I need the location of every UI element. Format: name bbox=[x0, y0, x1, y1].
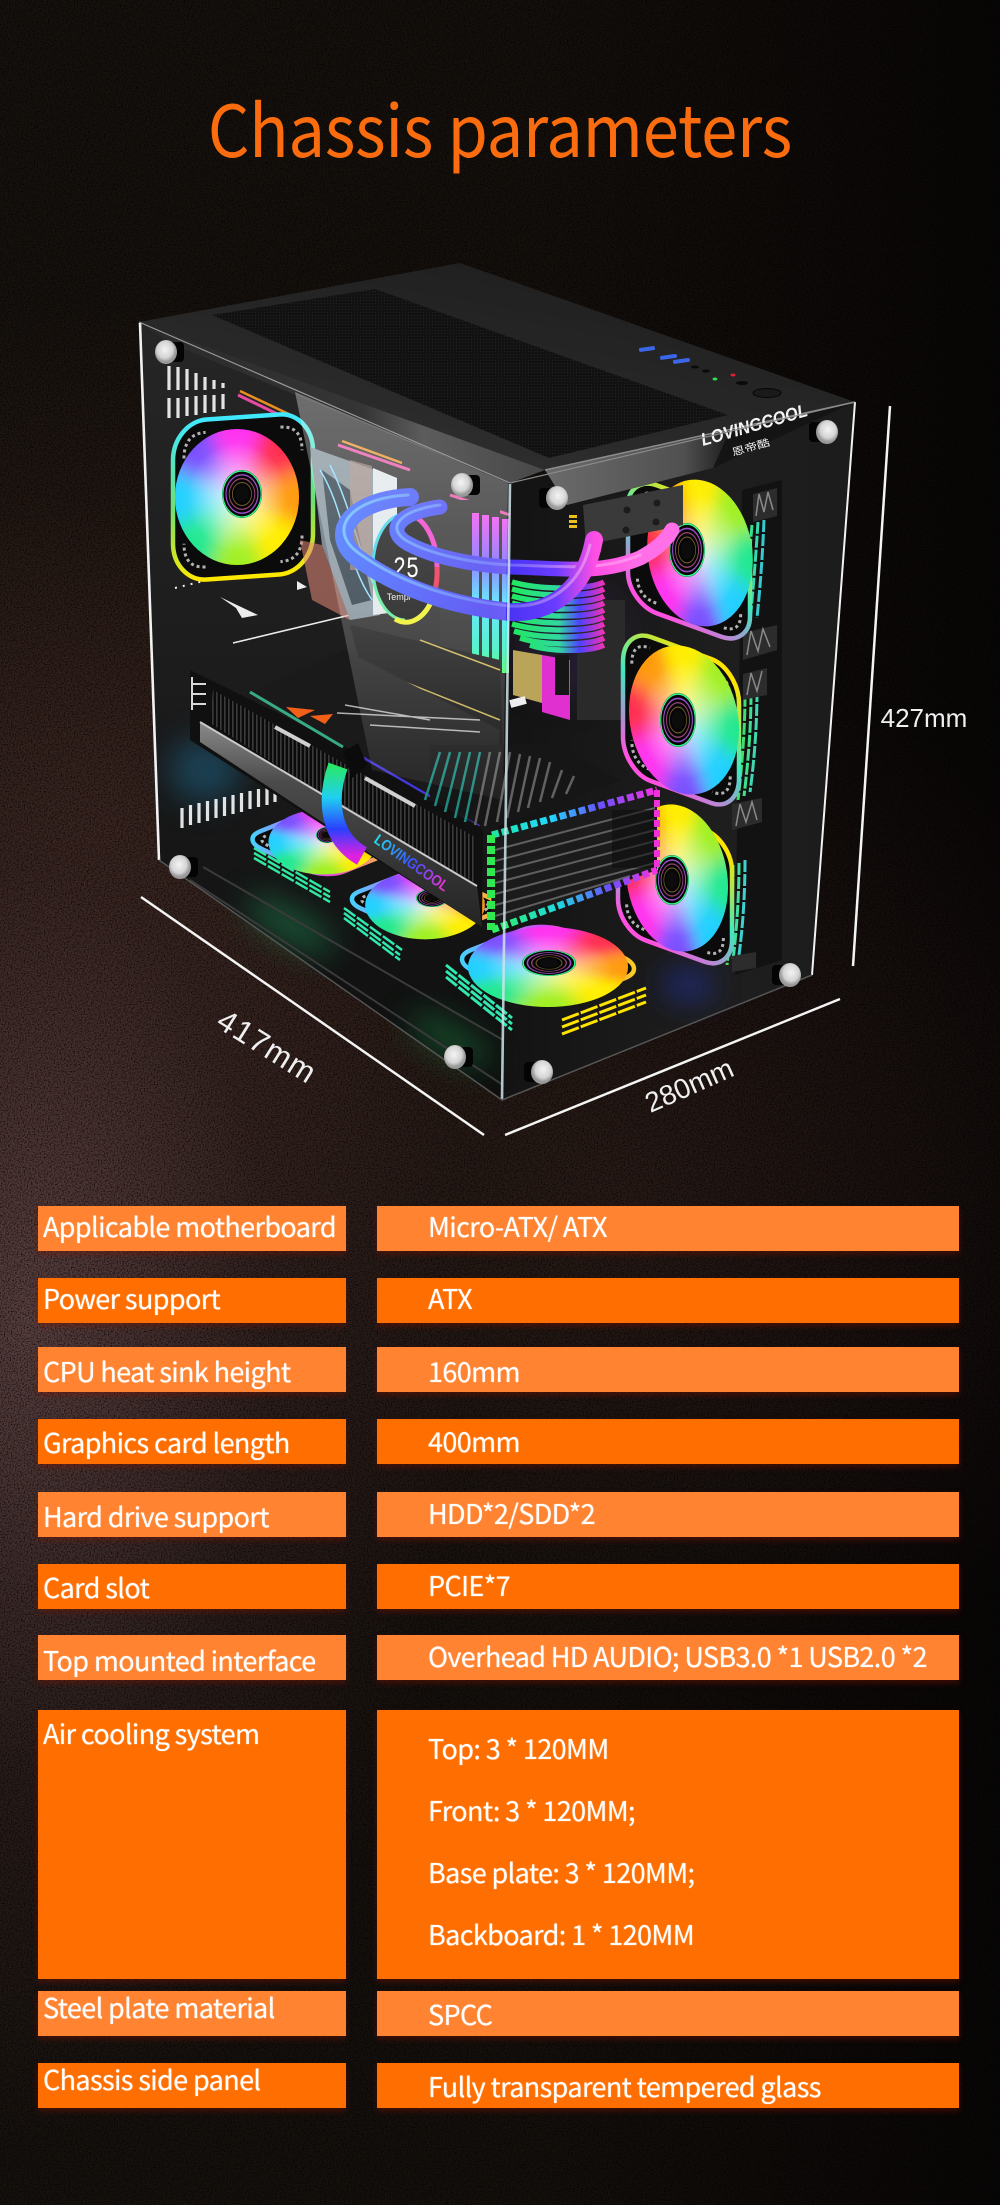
spec row: Graphics card length bbox=[36, 1419, 962, 1470]
value cell: PCIE*7 bbox=[428, 1565, 510, 1604]
label cell bbox=[38, 1492, 346, 1537]
card body bbox=[190, 670, 483, 927]
fan: bottom front bbox=[439, 912, 657, 1034]
spec row: Air cooling system bbox=[35, 1710, 962, 1985]
RGB cable bundle bbox=[512, 582, 604, 650]
fan: rear bbox=[152, 404, 322, 590]
dimension: width 280mm: 280mm bbox=[640, 1052, 738, 1119]
value cell: Overhead HD AUDIO; USB3.0 *1 USB2.0 *2 bbox=[428, 1636, 927, 1675]
value cell: Front: 3 * 120MM; bbox=[428, 1790, 635, 1829]
rear RGB strip bbox=[238, 395, 510, 515]
spec row: CPU heat sink height bbox=[36, 1347, 962, 1398]
side fans backing with LEDs bbox=[727, 480, 782, 975]
dimension: depth 417mm: 417mm bbox=[211, 1002, 324, 1091]
label cell bbox=[38, 1710, 346, 1979]
value cell bbox=[377, 1419, 959, 1464]
fan: bottom middle bbox=[340, 858, 510, 960]
top control panel bbox=[639, 346, 781, 398]
card logo: LOVINGCOOL bbox=[371, 831, 452, 895]
value cell bbox=[377, 1991, 959, 2036]
spec row: Card slot bbox=[35, 1564, 962, 1615]
spec row: Hard drive support bbox=[36, 1492, 962, 1543]
value cell: HDD*2/SDD*2 bbox=[428, 1493, 595, 1532]
label cell bbox=[38, 1419, 346, 1464]
value cell: ATX bbox=[428, 1278, 472, 1317]
label cell bbox=[38, 2063, 346, 2108]
spec row: Chassis side panel bbox=[35, 2059, 962, 2114]
spec row: Steel plate material bbox=[35, 1987, 962, 2042]
value cell: Micro-ATX/ ATX bbox=[428, 1206, 607, 1245]
label cell: Chassis side panel bbox=[43, 2059, 260, 2098]
value cell bbox=[377, 1710, 959, 1979]
label cell: Card slot bbox=[43, 1567, 149, 1606]
left top edge band bbox=[139, 322, 545, 483]
fan: bottom rear bbox=[241, 798, 405, 902]
label cell bbox=[38, 1347, 346, 1392]
value cell: Fully transparent tempered glass bbox=[428, 2066, 821, 2105]
label cell: Hard drive support bbox=[43, 1496, 269, 1535]
RAM modules bbox=[472, 513, 509, 673]
value cell bbox=[377, 1492, 959, 1537]
label cell: Top mounted interface bbox=[43, 1640, 316, 1679]
brand logo on chassis: LOVINGCOOL bbox=[699, 400, 810, 450]
spec row: Applicable motherboard bbox=[36, 1206, 962, 1257]
brand logo on chassis: 恩帝酷 bbox=[730, 434, 771, 459]
value cell bbox=[377, 1206, 959, 1251]
PCIe bracket bbox=[192, 677, 206, 710]
front lip band bbox=[510, 402, 855, 510]
label cell: Graphics card length bbox=[43, 1422, 290, 1461]
metal plate bbox=[200, 722, 482, 927]
pump display bbox=[373, 514, 437, 622]
card shroud above heatsink bbox=[250, 650, 500, 830]
left glass side interior bbox=[139, 322, 510, 1100]
label cell: Applicable motherboard bbox=[43, 1206, 336, 1245]
label cell: Power support bbox=[43, 1278, 220, 1317]
value cell bbox=[377, 1278, 959, 1323]
title: Chassis parameters bbox=[208, 73, 792, 178]
interior glow bbox=[169, 580, 712, 1075]
value cell bbox=[377, 1564, 959, 1609]
dimension: height 427mm bbox=[853, 406, 967, 966]
label cell bbox=[38, 1278, 346, 1323]
manifold block bbox=[573, 485, 683, 545]
water cooling tubes bbox=[344, 495, 672, 612]
cable connector bbox=[343, 743, 367, 778]
glass reflection bbox=[295, 392, 508, 800]
graphics card bbox=[190, 650, 500, 927]
top panel bbox=[139, 263, 855, 470]
value cell: Backboard: 1 * 120MM bbox=[428, 1914, 694, 1953]
power cable bbox=[332, 766, 362, 856]
product illustration: glass PC case with dimensions bbox=[138, 263, 966, 1136]
PSU shroud bbox=[490, 790, 657, 930]
value cell: Top: 3 * 120MM bbox=[428, 1728, 609, 1767]
label cell bbox=[38, 1564, 346, 1609]
value cell: 400mm bbox=[428, 1421, 520, 1460]
floor rails bbox=[190, 867, 503, 1085]
bracket marks bbox=[220, 581, 307, 618]
pump display: Temp/℃ bbox=[387, 592, 421, 602]
spec row: Top mounted interface bbox=[35, 1635, 962, 1686]
dimension: width 280mm bbox=[505, 999, 840, 1135]
pump display: 25 bbox=[393, 553, 419, 587]
value cell bbox=[377, 1347, 959, 1392]
label cell: Steel plate material bbox=[43, 1987, 275, 2026]
fan: front middle bbox=[578, 577, 790, 863]
heatsink fins bbox=[210, 690, 475, 883]
dimension: depth 417mm bbox=[141, 897, 484, 1135]
label cell: CPU heat sink height bbox=[43, 1351, 290, 1390]
fan: front top bbox=[598, 412, 802, 694]
PSU shroud grille bbox=[425, 745, 620, 830]
glass edges bbox=[139, 322, 855, 1100]
value cell bbox=[377, 2063, 959, 2108]
label cell: Air cooling system bbox=[43, 1713, 259, 1752]
spec row: Power support bbox=[36, 1278, 962, 1329]
fan: front bottom bbox=[579, 737, 775, 1019]
chassis body bbox=[139, 263, 855, 1100]
top mesh filter bbox=[212, 289, 728, 458]
right glass side interior bbox=[502, 402, 855, 1100]
value cell: 160mm bbox=[428, 1351, 520, 1390]
motherboard and heatsink graphics bbox=[300, 447, 500, 650]
label cell bbox=[38, 1991, 346, 2036]
rear panel vents bbox=[169, 366, 350, 828]
value cell: SPCC bbox=[428, 1994, 492, 2033]
dimension: height 427mm: 427mm bbox=[881, 703, 967, 733]
screws bbox=[155, 340, 838, 1084]
value cell: Base plate: 3 * 120MM; bbox=[428, 1852, 694, 1891]
motherboard lower bbox=[350, 600, 625, 830]
